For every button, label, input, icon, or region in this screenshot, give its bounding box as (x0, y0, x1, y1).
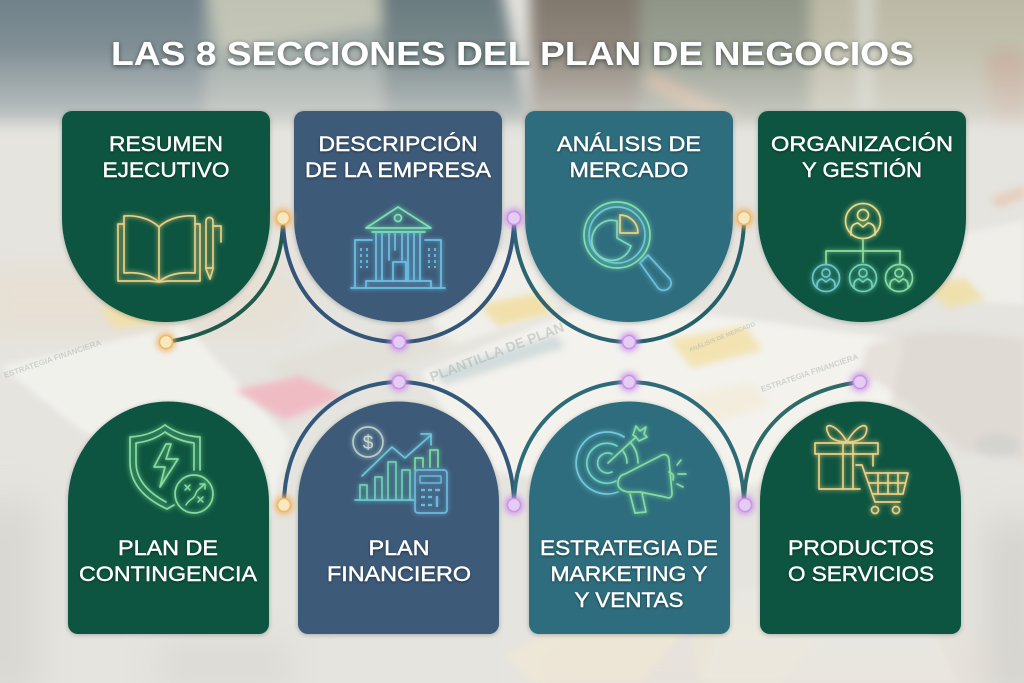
icon: gift and cart (815, 426, 908, 514)
heading: plan de contingencia: CONTINGENCIA (79, 563, 257, 586)
dots: violet nodes (390, 209, 869, 514)
faint printed headings on the photo: PLANTILLA DE PLAN (427, 319, 566, 385)
panel: plan financiero (298, 401, 499, 634)
heading: estrategia de marketing y ventas: ESTRATEGIA DE (540, 537, 718, 560)
paper documents (0, 220, 1024, 683)
icon: target and megaphone (576, 426, 686, 513)
heading: analisis de mercado: ANÁLISIS DE (557, 133, 701, 156)
heading: plan financiero: FINANCIERO (327, 563, 471, 586)
heading: estrategia de marketing y ventas (540, 537, 718, 612)
icon: book and pen (118, 216, 221, 282)
heading: estrategia de marketing y ventas: MARKETING Y (550, 563, 708, 586)
icon: shield with strategy (130, 425, 213, 513)
panel: estrategia de marketing y ventas (529, 401, 730, 634)
heading: resumen ejecutivo (102, 133, 230, 182)
panel: productos o servicios (760, 401, 961, 634)
heading: productos o servicios: PRODUCTOS (788, 537, 934, 560)
icon: chart, coin and calculator (353, 427, 447, 513)
heading: organizacion y gestion: Y GESTIÓN (802, 159, 922, 182)
top of photo: people and desk (0, 0, 1024, 125)
icon: org chart (812, 204, 912, 292)
heading: plan de contingencia (79, 537, 257, 586)
heading: productos o servicios (788, 537, 934, 586)
panel: resumen ejecutivo (62, 111, 270, 322)
sticky notes and photo details (100, 186, 1024, 460)
panel: organizacion y gestion (758, 111, 966, 322)
panel: descripcion de la empresa (294, 111, 502, 322)
faint printed headings on the photo (3, 319, 860, 394)
icon: bank building (351, 207, 445, 288)
connector: bottom path (284, 382, 860, 505)
faint printed headings on the photo: ESTRATEGIA FINANCIERA (3, 338, 103, 380)
panel: analisis de mercado (525, 111, 733, 322)
icon: magnifier with pie chart (584, 202, 671, 290)
heading: analisis de mercado: MERCADO (570, 159, 688, 182)
panel: plan de contingencia (68, 401, 269, 634)
heading: plan de contingencia: PLAN DE (118, 537, 218, 560)
heading: plan financiero (327, 537, 471, 586)
heading: organizacion y gestion (771, 133, 953, 182)
heading: estrategia de marketing y ventas: Y VENTAS (574, 589, 684, 612)
heading: descripcion de la empresa: DESCRIPCIÓN (318, 133, 478, 156)
heading: analisis de mercado (557, 133, 701, 182)
heading: organizacion y gestion: ORGANIZACIÓN (771, 133, 953, 156)
heading: productos o servicios: O SERVICIOS (788, 563, 934, 586)
dots: amber nodes (157, 209, 753, 514)
warm desk and paper tones (0, 270, 1024, 683)
faint printed headings on the photo: ESTRATEGIA FINANCIERA (760, 352, 860, 394)
heading: descripcion de la empresa: DE LA EMPRESA (305, 159, 491, 182)
heading: plan financiero: PLAN (368, 537, 430, 560)
title: LAS 8 SECCIONES DEL PLAN DE NEGOCIOS (111, 35, 914, 72)
heading: resumen ejecutivo: RESUMEN (109, 133, 223, 156)
heading: resumen ejecutivo: EJECUTIVO (102, 159, 230, 182)
icon: chart, coin and calculator: $ (363, 433, 374, 454)
connector: top path (166, 218, 744, 342)
heading: descripcion de la empresa (305, 133, 491, 182)
faint printed headings on the photo: ANÁLISIS DE MERCADO (688, 321, 757, 354)
